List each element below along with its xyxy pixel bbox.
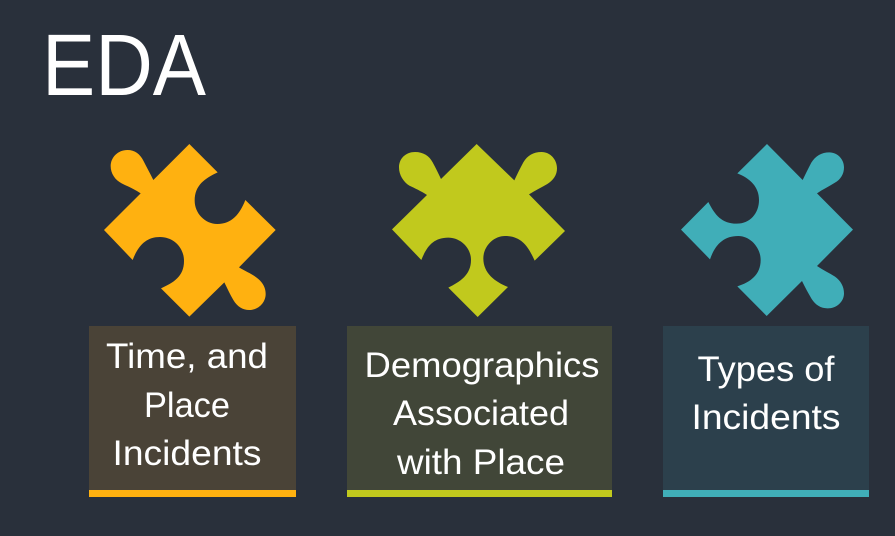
label: time and place	[106, 337, 268, 473]
label: demographics	[364, 346, 600, 482]
label: types of incidents: Types of	[698, 350, 835, 389]
label: time and place: Incidents	[112, 434, 262, 473]
icon: green puzzle piece	[392, 144, 565, 317]
label: types of incidents: Incidents	[692, 398, 840, 437]
label: demographics: Associated	[393, 394, 569, 433]
label: demographics: with Place	[396, 443, 565, 482]
panel: demographics	[347, 326, 612, 497]
title: EDA	[42, 17, 206, 114]
label: time and place: Time, and	[106, 337, 268, 376]
label: time and place: Place	[144, 386, 230, 425]
label: demographics: Demographics	[364, 346, 600, 385]
label: types of incidents	[692, 350, 840, 437]
panel: time and place	[89, 326, 296, 497]
icon: orange puzzle piece	[104, 144, 276, 317]
panel: types of incidents	[663, 326, 869, 497]
icon: teal puzzle piece	[681, 144, 853, 316]
